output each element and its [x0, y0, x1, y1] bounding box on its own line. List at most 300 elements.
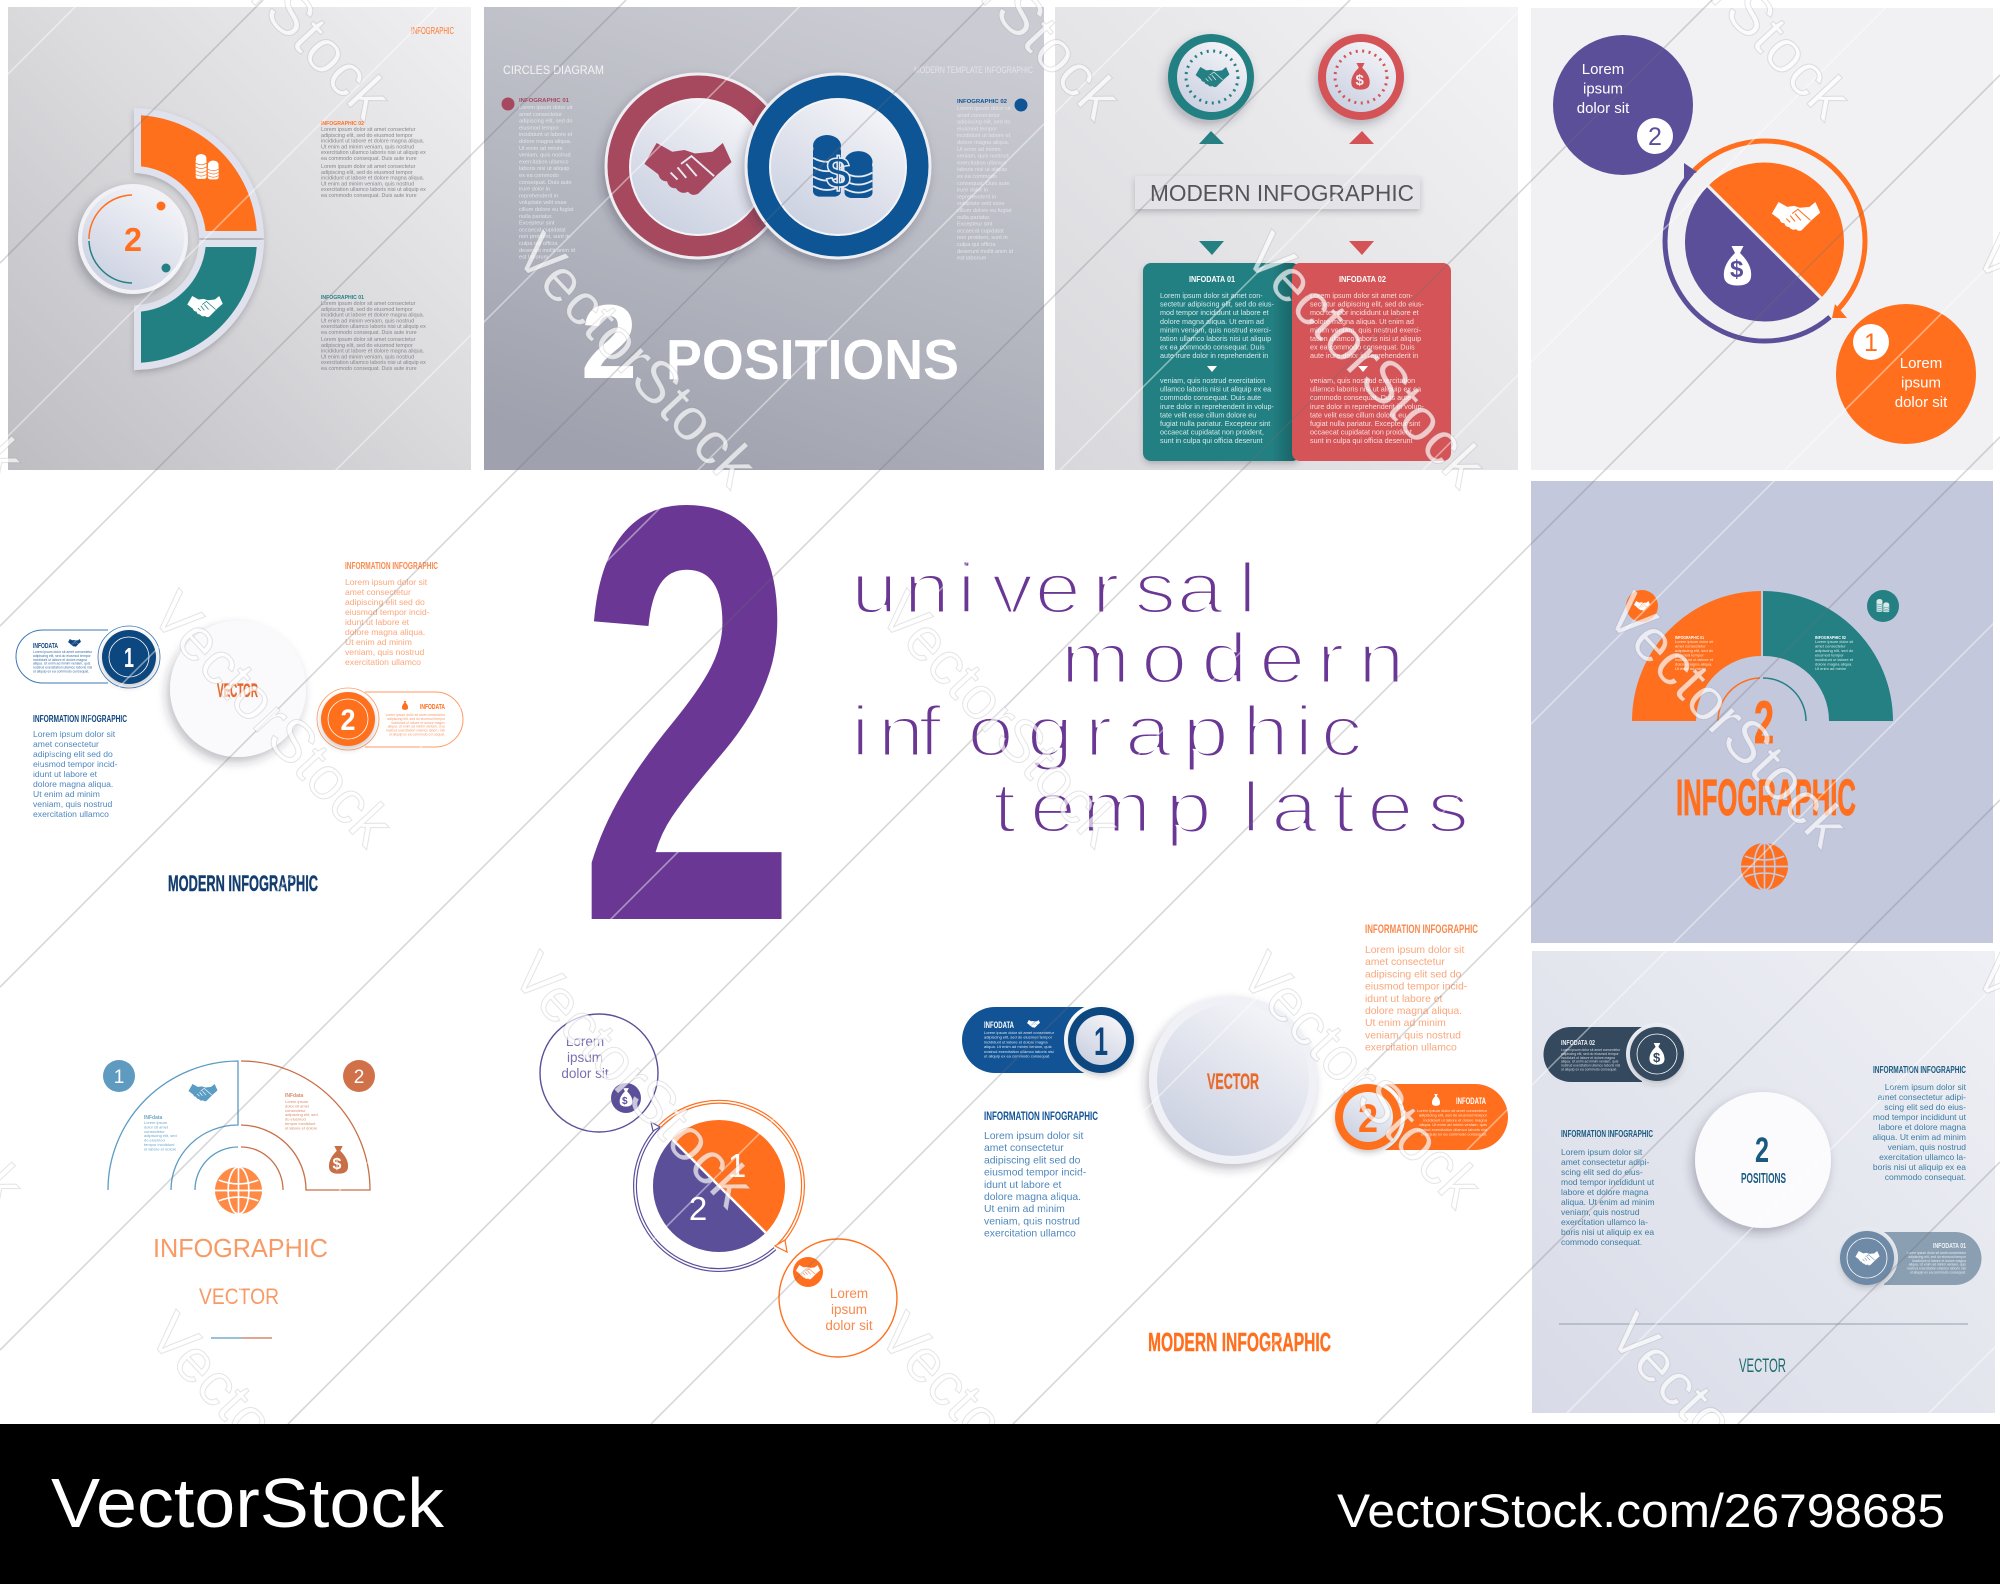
VectorStock watermarks: VectorStock	[1232, 220, 1500, 500]
orange text block: dolore magna aliqua.	[1365, 1006, 1462, 1017]
icon: brown bag	[329, 1146, 348, 1174]
VectorStock watermarks: Vecto	[136, 1300, 287, 1456]
text block 01	[321, 295, 426, 372]
orange pill: 2	[1358, 1097, 1378, 1141]
orange text block: idunt ut labore et	[1365, 994, 1443, 1005]
orange text: amet consectetur	[1675, 644, 1706, 648]
panel: split circle with arrows	[1531, 8, 1993, 470]
orange text block: exercitation ullamco	[1365, 1043, 1457, 1054]
triangles down	[1199, 241, 1374, 255]
panel: outline half rings	[103, 1060, 375, 1338]
card: infodata 02: irure dolor in reprehenderit in volup-	[1310, 402, 1424, 411]
text block 02	[321, 121, 426, 199]
left text block: amet consectetur adipi-	[1561, 1157, 1650, 1167]
orange text block: amet consectetur	[345, 587, 411, 597]
heading: vector: VECTOR	[199, 1284, 279, 1309]
right text block: scing elit sed do eius-	[1884, 1102, 1966, 1112]
orange text block: eiusmod tempor incid-	[1365, 982, 1467, 993]
blue text block: veniam, quis nostrud	[984, 1216, 1080, 1227]
red badge: $	[1356, 72, 1364, 89]
orange text block: idunt ut labore et	[345, 617, 410, 627]
card: infodata 01: irure dolor in reprehenderit in volup-	[1160, 402, 1274, 411]
blue outlined pill: 1	[124, 642, 134, 673]
blue text block: eiusmod tempor incid-	[984, 1168, 1086, 1179]
left column: Lorem ipsum dolor sit	[519, 105, 573, 111]
teal text: INFOGRAPHIC 02	[1815, 635, 1846, 640]
blue text block: Lorem ipsum dolor sit	[33, 729, 116, 739]
text block 02: Lorem ipsum dolor sit amet consectetur	[321, 164, 416, 170]
headline: universal modern infographic templates: templates	[993, 769, 1469, 848]
number dot 1	[103, 1060, 135, 1092]
big 2 positions title: POSITIONS	[666, 328, 959, 392]
card: infodata 02: tation ullamco laboris nisi ut aliquip	[1310, 334, 1421, 343]
blue pill: 1	[1094, 1020, 1108, 1064]
dark pill infodata 02: nostrud exercitation ullamco laboris nisi	[1561, 1064, 1620, 1068]
card: infodata 01: INFODATA 01	[1189, 274, 1235, 284]
right text block: mod tempor incididunt ut	[1873, 1112, 1967, 1122]
card: infodata 02: ullamco laboris nisi ut aliquip ex ea	[1310, 385, 1421, 394]
orange outlined pill: nostrud exercitation ullamco laboris nisi	[386, 729, 445, 733]
orange pill: ut aliquip ex ea commodo consequat.	[1421, 1132, 1487, 1136]
headline: universal modern infographic templates: universal	[851, 550, 1257, 629]
right column: non proident, sunt in	[957, 235, 1008, 241]
left column: cillum dolore eu fugiat	[519, 207, 574, 213]
split disc with numbers	[653, 1120, 785, 1252]
VectorStock watermarks: VectorStock	[500, 940, 768, 1220]
orange outlined pill: INFODATA	[420, 702, 445, 711]
orange half	[1632, 591, 1761, 721]
heading: circles diagram: CIRCLES DIAGRAM	[503, 63, 604, 77]
left column: irure dolor in	[519, 187, 550, 193]
blue pill: aliqua. Ut enim ad minim veniam, quis	[984, 1044, 1052, 1049]
blue text block: dolore magna aliqua.	[33, 779, 113, 789]
blue small text: dolor sit amet	[144, 1124, 169, 1129]
card: infodata 01: fugiat nulla pariatur. Excepteur sint	[1160, 419, 1270, 428]
orange outline callout: Lorem	[830, 1286, 868, 1301]
orange icon dot	[1626, 590, 1658, 622]
blue text block: Ut enim ad minim	[33, 789, 100, 799]
orange text block: veniam, quis nostrud	[1365, 1030, 1461, 1041]
card: infodata 01: mod tempor incididunt ut labore et	[1160, 308, 1269, 317]
left column	[502, 98, 575, 261]
text block 01: incididunt ut labore et dolore magna aliqua.	[321, 349, 424, 355]
maroon ring	[606, 74, 790, 258]
orange pill: incididunt ut labore et dolore magna	[1423, 1117, 1488, 1122]
orange callout: Lorem	[1900, 355, 1942, 372]
brown small text: Lorem ipsum	[285, 1099, 309, 1104]
text block 02: INFOGRAPHIC 02	[321, 121, 364, 127]
left column: nulla pariatur.	[519, 214, 553, 220]
teal text: eiusmod tempor	[1815, 652, 1844, 658]
card: infodata 02: occaecat cupidatat non proident,	[1310, 428, 1414, 437]
heading: modern infographic: MODERN INFOGRAPHIC	[168, 871, 318, 896]
teal text	[1815, 635, 1854, 671]
gray pill infodata 01: incididunt ut labore et dolore magna	[1912, 1259, 1966, 1263]
headline: universal modern infographic templates: infographic	[851, 693, 1363, 772]
left column: veniam, quis nostrud	[519, 153, 571, 159]
VectorStock watermarks: VectorStock	[1228, 940, 1496, 1220]
orange callout	[1836, 304, 1976, 444]
orange callout: ipsum	[1901, 374, 1941, 392]
blue text block	[984, 1111, 1098, 1240]
left text block: scing elit sed do eius-	[1561, 1167, 1643, 1177]
blue outlined pill	[16, 626, 160, 688]
VectorStock watermarks: Vecto	[866, 1300, 1017, 1456]
blue small text	[144, 1115, 177, 1151]
panel: middle-left outlined pills	[16, 560, 463, 896]
text block 02: incididunt ut labore et dolore magna aliqua.	[321, 139, 424, 145]
orange outline callout	[779, 1239, 897, 1357]
right column: ex ea commodo	[957, 174, 997, 180]
center disc: POSITIONS	[1741, 1170, 1786, 1187]
card: infodata 01: minim veniam, quis nostrud exerci-	[1160, 325, 1272, 334]
orange outlined pill: aliqua. Ut enim ad minim veniam, quis	[388, 725, 445, 729]
left column: occaecat cupidatat	[519, 227, 566, 233]
orange text: Ut enim ad minim	[1675, 666, 1707, 671]
blue text block: INFORMATION INFOGRAPHIC	[984, 1111, 1098, 1123]
icon: handshake	[187, 296, 223, 317]
center disc: 2	[1755, 1131, 1769, 1170]
panel: half donut on blue-gray	[1531, 481, 1993, 943]
dark pill infodata 02: adipiscing elit, sed do eiusmod tempor	[1561, 1052, 1620, 1056]
text block 02: adipiscing elit, sed do eiusmod tempor	[321, 170, 413, 176]
teal icon dot	[1867, 590, 1899, 622]
right column: culpa qui officia	[957, 242, 996, 248]
brown small text: ut labore et dolore	[285, 1125, 318, 1130]
text block 01: ea commodo consequat. Duis aute irure	[321, 366, 417, 372]
orange outlined pill: ut aliquip ex ea commodo consequat.	[389, 732, 445, 736]
left column: culpa qui officia	[519, 241, 558, 247]
blue text block: adipiscing elit sed do	[33, 749, 113, 759]
orange text: incididunt ut labore et	[1675, 657, 1714, 662]
text block 02: ea commodo consequat. Duis aute irure	[321, 156, 417, 162]
right text block: labore et dolore magna	[1879, 1122, 1966, 1132]
teal text: Lorem ipsum dolor sit	[1815, 639, 1854, 644]
card: infodata 01: sectetur adipiscing elit, sed do eius-	[1160, 300, 1274, 309]
blue small text: consectetur	[144, 1129, 165, 1134]
card: infodata 01: commodo consequat. Duis aute	[1160, 393, 1261, 402]
right column: eiusmod tempor	[957, 126, 997, 132]
card: infodata 01: Lorem ipsum dolor sit amet con-	[1160, 291, 1263, 300]
right column: incididunt ut labore et	[957, 133, 1011, 139]
double ring arrows	[635, 1102, 803, 1270]
left text block: boris nisi ut aliquip ex ea	[1561, 1227, 1654, 1237]
dark pill infodata 02: $	[1653, 1050, 1661, 1065]
blue text block: exercitation ullamco	[984, 1229, 1076, 1240]
purple callout: ipsum	[1583, 80, 1623, 98]
left column: dolore magna aliqua.	[519, 139, 572, 145]
right column: INFOGRAPHIC 02	[957, 99, 1007, 105]
blue outlined pill: adipiscing elit, sed do eiusmod tempor	[33, 654, 92, 658]
title band: MODERN INFOGRAPHIC	[1150, 180, 1414, 206]
teal text: adipiscing elit, sed do	[1815, 648, 1854, 653]
icon: blue handshake	[188, 1084, 218, 1101]
purple callout: 2	[1648, 123, 1662, 151]
left text block: aliqua. Ut enim ad minim	[1561, 1197, 1655, 1207]
text block 01: exercitation ullamco laboris nisi ut aliquip ex	[321, 360, 426, 366]
right text block: aliqua. Ut enim ad minim	[1872, 1132, 1966, 1142]
orange text block: Ut enim ad minim	[345, 637, 412, 647]
text block 02: exercitation ullamco laboris nisi ut aliquip ex	[321, 187, 426, 193]
orange pill: Lorem ipsum dolor sit amet consectetur	[1417, 1108, 1488, 1113]
left column: consequat. Duis aute	[519, 180, 572, 186]
center disc with number: 2	[124, 221, 142, 258]
orange text block: exercitation ullamco	[345, 657, 421, 667]
blue pill: ut aliquip ex ea commodo consequat.	[984, 1054, 1050, 1058]
left column: non proident, sunt in	[519, 234, 570, 240]
blue text block: veniam, quis nostrud	[33, 799, 113, 809]
headline: universal modern infographic templates	[851, 550, 1469, 848]
orange text block: INFORMATION INFOGRAPHIC	[1365, 924, 1478, 936]
number dot 1: 1	[114, 1067, 124, 1088]
blue text block: INFORMATION INFOGRAPHIC	[33, 713, 127, 725]
left text block: veniam, quis nostrud	[1561, 1207, 1640, 1217]
gray pill infodata 01: ut aliquip ex ea commodo consequat.	[1910, 1270, 1966, 1274]
purple outline callout: Lorem	[566, 1034, 604, 1049]
blue outlined pill: INFODATA	[33, 641, 58, 650]
left column: voluptate velit esse	[519, 200, 567, 206]
card: infodata 02: minim veniam, quis nostrud exerci-	[1310, 325, 1422, 334]
left text block: INFORMATION INFOGRAPHIC	[1561, 1128, 1653, 1140]
orange outlined pill: incididunt ut labore et dolore magna	[391, 721, 445, 725]
orange outline callout: ipsum	[831, 1302, 867, 1317]
icon: globe	[1741, 843, 1788, 890]
orange text block: veniam, quis nostrud	[345, 647, 425, 657]
card: infodata 01: sunt in culpa qui officia deserunt	[1160, 436, 1263, 445]
center disc with number	[80, 186, 186, 292]
split disc with numbers: 1	[728, 1147, 746, 1184]
brown small text: INFdata	[285, 1093, 304, 1099]
orange pill: nostrud exercitation ullamco laboris nisi	[1417, 1127, 1487, 1132]
left column: Excepteur sint	[519, 221, 555, 227]
dark pill infodata 02: Lorem ipsum dolor sit amet consectetur	[1561, 1048, 1621, 1052]
orange text	[1675, 635, 1714, 671]
text block 01: adipiscing elit, sed do eiusmod tempor	[321, 307, 413, 313]
orange callout: dolor sit	[1895, 394, 1948, 411]
teal badge	[1168, 34, 1254, 120]
right column: deserunt mollit anim id	[957, 249, 1013, 255]
right column: dolore magna aliqua.	[957, 140, 1010, 146]
orange pill: adipiscing elit, sed do eiusmod tempor	[1419, 1113, 1488, 1118]
blue text block: eiusmod tempor incid-	[33, 759, 118, 769]
VectorStock watermarks: VectorStock	[1594, 580, 1862, 860]
blue text block	[33, 713, 127, 819]
text block 02: incididunt ut labore et dolore magna aliqua.	[321, 176, 424, 182]
right text block: Lorem ipsum dolor sit	[1885, 1082, 1967, 1092]
blue text block: idunt ut labore et	[984, 1180, 1062, 1191]
right column: adipiscing elit, sed do	[957, 120, 1010, 126]
center disc	[170, 621, 306, 757]
purple callout: Lorem	[1582, 61, 1624, 78]
card: infodata 02: sunt in culpa qui officia deserunt	[1310, 436, 1413, 445]
teal text: incididunt ut labore et	[1815, 657, 1854, 662]
text block 02: Ut enim ad minim veniam, quis nostrud	[321, 144, 414, 150]
orange text: eiusmod tempor	[1675, 652, 1704, 658]
panel: semicircle two sectors on gray	[8, 7, 471, 470]
card: infodata 01: occaecat cupidatat non proident,	[1160, 428, 1264, 437]
orange callout: 1	[1864, 329, 1878, 357]
text block 01: ea commodo consequat. Duis aute irure	[321, 330, 417, 336]
right column: laboris nisi ut aliquip	[957, 167, 1007, 173]
left column: eiusmod tempor	[519, 125, 559, 131]
left column: Ut enim ad minim	[519, 146, 563, 152]
purple callout: dolor sit	[1577, 100, 1630, 117]
blue small text: ut labore et dolore	[144, 1146, 177, 1151]
orange text block	[1365, 924, 1478, 1054]
orange pill: aliqua. Ut enim ad minim veniam, quis	[1419, 1122, 1487, 1127]
card: infodata 01: aute irure dolor in reprehenderit in	[1160, 351, 1268, 360]
right column: Excepteur sint	[957, 222, 993, 228]
right text block: boris nisi ut aliquip ex ea	[1873, 1162, 1966, 1172]
dark pill infodata 02	[1543, 1023, 1688, 1085]
blue outlined pill: nostrud exercitation ullamco laboris nisi	[33, 666, 92, 670]
card: infodata 02: sectetur adipiscing elit, sed do eius-	[1310, 300, 1424, 309]
heading: infographic: INFOGRAPHIC	[153, 1233, 328, 1263]
orange text block: Lorem ipsum dolor sit	[345, 577, 428, 587]
footer bar	[0, 1424, 2000, 1584]
orange text: INFOGRAPHIC 01	[1675, 635, 1704, 640]
card: infodata 02: tate velit esse cillum dolore eu	[1310, 410, 1406, 419]
triangles up	[1199, 131, 1374, 144]
card: infodata 02: fugiat nulla pariatur. Excepteur sint	[1310, 419, 1420, 428]
orange text block: INFORMATION INFOGRAPHIC	[345, 560, 438, 572]
teal half	[1763, 591, 1893, 721]
card: infodata 01	[1143, 263, 1300, 461]
right column: amet consectetur	[957, 113, 1000, 119]
text block 02: Lorem ipsum dolor sit amet consectetur	[321, 127, 416, 133]
card: infodata 02: ex ea commodo consequat. Duis	[1310, 343, 1415, 352]
left text block: exercitation ullamco la-	[1561, 1217, 1648, 1227]
heading: modern template: MODERN TEMPLATE INFOGRAPHIC	[914, 65, 1033, 75]
dark pill infodata 02: aliqua. Ut enim ad minim veniam, quis	[1561, 1060, 1619, 1064]
left column: laboris nisi ut aliquip	[519, 166, 569, 172]
text block 01: INFOGRAPHIC 01	[321, 295, 364, 301]
blue text block: exercitation ullamco	[33, 809, 109, 819]
card: infodata 02: INFODATA 02	[1339, 274, 1386, 284]
red badge	[1318, 34, 1404, 120]
panel: filled pills with center disc	[962, 924, 1508, 1357]
right text block: veniam, quis nostrud	[1888, 1142, 1966, 1152]
right column: irure dolor in	[957, 188, 988, 194]
brown arcs	[241, 1061, 370, 1190]
blue pill: Lorem ipsum dolor sit amet consectetur	[984, 1030, 1055, 1035]
left column: exercitation ullamco	[519, 159, 568, 165]
orange text: adipiscing elit, sed do	[1675, 648, 1714, 653]
card: infodata 02	[1292, 263, 1451, 461]
card: infodata 02: veniam, quis nostrud exercitation	[1310, 376, 1415, 385]
panel: circles diagram 2 positions	[484, 7, 1044, 470]
footer logo: VectorStock	[51, 1464, 445, 1542]
blue pill: nostrud exercitation ullamco laboris nisi	[984, 1049, 1054, 1054]
gray pill infodata 01	[1836, 1227, 1981, 1289]
orange text block	[345, 560, 438, 667]
orange text block: adipiscing elit sed do	[345, 597, 425, 607]
orange text block: Lorem ipsum dolor sit	[1365, 945, 1464, 956]
orange sector	[141, 115, 257, 231]
orange text block: adipiscing elit sed do	[1365, 969, 1462, 980]
text block 01: Lorem ipsum dolor sit amet consectetur	[321, 337, 416, 343]
orange outlined pill: Lorem ipsum dolor sit amet consectetur	[386, 713, 446, 717]
left column: INFOGRAPHIC 01	[519, 98, 569, 104]
panel: modern infographic cards	[1055, 7, 1518, 470]
text block 01: adipiscing elit, sed do eiusmod tempor	[321, 343, 413, 349]
left text block	[1561, 1128, 1655, 1247]
dark pill infodata 02: ut aliquip ex ea commodo consequat.	[1561, 1068, 1617, 1072]
right column: exercitation ullamco	[957, 160, 1006, 166]
VectorStock watermarks: VectorStock	[139, 579, 407, 859]
left column: adipiscing elit, sed do	[519, 119, 572, 125]
text block 01: Lorem ipsum dolor sit amet consectetur	[321, 301, 416, 307]
panel: 2 positions on pale blue	[1532, 951, 1995, 1413]
right column: cillum dolore eu fugiat	[957, 208, 1012, 214]
gray pill infodata 01: adipiscing elit, sed do eiusmod tempor	[1908, 1255, 1967, 1259]
blue small text: INFdata	[144, 1115, 163, 1121]
heading: modern infographic: MODERN INFOGRAPHIC	[1148, 1327, 1331, 1357]
card: infodata 01: dolore magna aliqua. Ut enim ad	[1160, 317, 1264, 326]
dark pill infodata 02: INFODATA 02	[1561, 1038, 1595, 1047]
right column: nulla pariatur.	[957, 215, 991, 221]
blue outlined pill: aliqua. Ut enim ad minim veniam, quis	[33, 662, 91, 666]
left column: deserunt mollit anim id	[519, 248, 575, 254]
blue small text: adipiscing elit, sed	[144, 1133, 177, 1138]
text block 01: exercitation ullamco laboris nisi ut aliquip ex	[321, 324, 426, 330]
orange text block: amet consectetur	[1365, 957, 1445, 968]
text block 02: Ut enim ad minim veniam, quis nostrud	[321, 181, 414, 187]
split disc: $	[1730, 256, 1744, 283]
blue pill: adipiscing elit, sed do eiusmod tempor	[984, 1035, 1053, 1040]
orange pill	[1331, 1080, 1508, 1154]
blue pill	[962, 1003, 1138, 1077]
orange text block: Ut enim ad minim	[1365, 1018, 1446, 1029]
right column: Lorem ipsum dolor sit	[957, 106, 1011, 112]
panel: outline split circle	[540, 1014, 897, 1357]
big purple number 2: 2	[578, 382, 797, 1045]
left column: amet consectetur	[519, 112, 562, 118]
teal text: Ut enim ad minim	[1815, 666, 1847, 671]
teal text: dolore magna aliqua.	[1815, 662, 1852, 666]
center disc	[1695, 1092, 1831, 1228]
blue small text: Lorem ipsum	[144, 1120, 168, 1125]
left text block: Lorem ipsum dolor sit	[1561, 1147, 1643, 1157]
center disc: VECTOR	[1207, 1069, 1259, 1094]
left column: reprehenderit in	[519, 193, 558, 199]
icon: brown bag: $	[332, 1156, 342, 1173]
purple outline callout: ipsum	[567, 1050, 603, 1065]
right column: Ut enim ad minim	[957, 147, 1001, 153]
orange text: Lorem ipsum dolor sit	[1675, 639, 1714, 644]
icon: coins	[196, 154, 219, 179]
orange text block: dolore magna aliqua.	[345, 627, 425, 637]
gray pill infodata 01: INFODATA 01	[1933, 1241, 1966, 1250]
blue text block: Lorem ipsum dolor sit	[984, 1131, 1083, 1142]
blue text block: dolore magna aliqua.	[984, 1192, 1081, 1203]
gray pill infodata 01: nostrud exercitation ullamco laboris nisi	[1907, 1267, 1966, 1271]
underline	[211, 1337, 272, 1339]
split disc	[1685, 162, 1844, 322]
left text block: commodo consequat.	[1561, 1237, 1642, 1247]
number dot 2: 2	[354, 1067, 364, 1088]
right text block	[1872, 1064, 1967, 1182]
text block 01: Ut enim ad minim veniam, quis nostrud	[321, 354, 414, 360]
blue small text: do eiusmod	[144, 1138, 165, 1143]
footer url: VectorStock.com/26798685	[1337, 1484, 1945, 1537]
heading: vector: VECTOR	[1739, 1356, 1786, 1377]
split disc with numbers: 2	[689, 1190, 707, 1227]
card: infodata 01: ullamco laboris nisi ut aliquip ex ea	[1160, 385, 1271, 394]
text block 02: ea commodo consequat. Duis aute irure	[321, 193, 417, 199]
purple outline callout	[540, 1014, 658, 1132]
VectorStock watermarks: VectorStock	[867, 579, 1135, 859]
